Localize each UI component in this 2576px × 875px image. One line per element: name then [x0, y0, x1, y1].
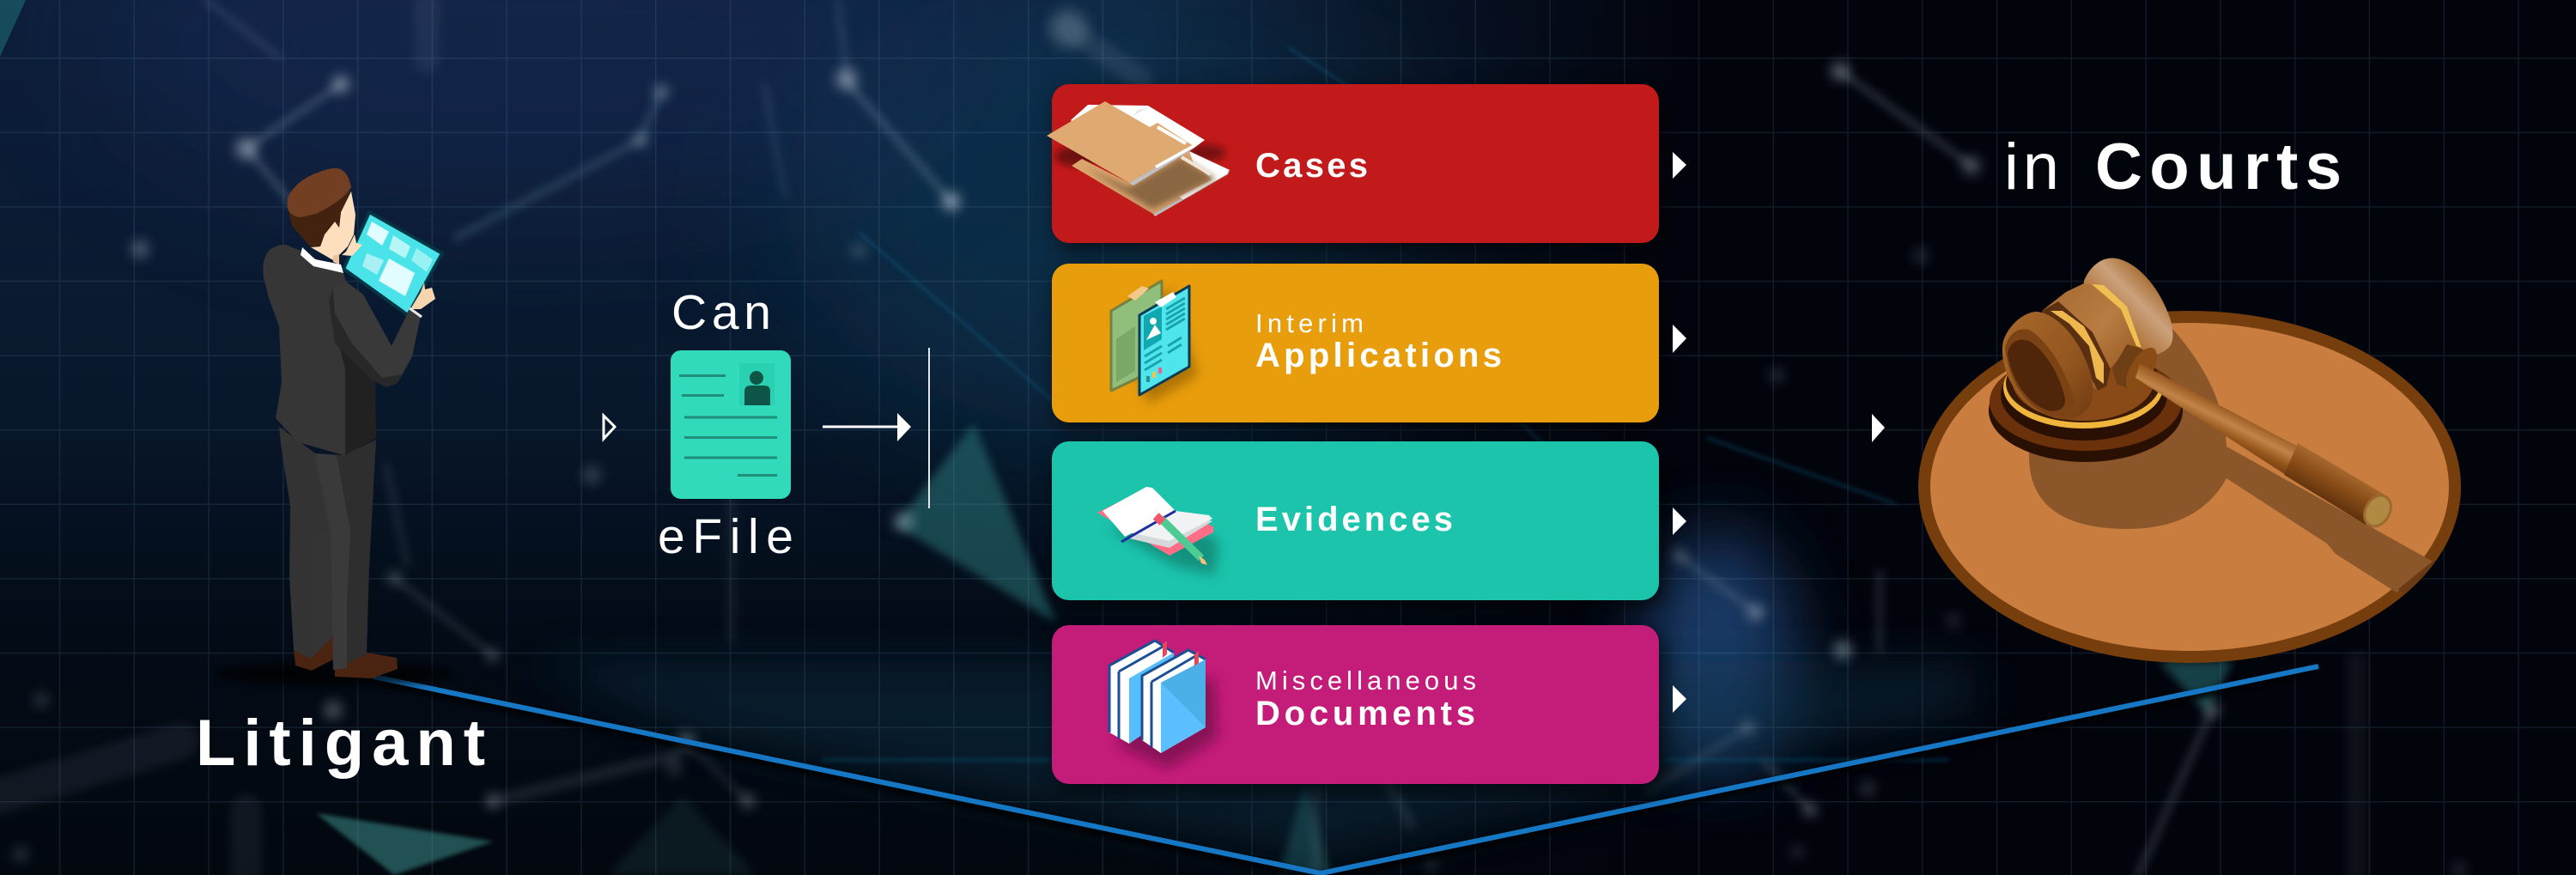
gavel head [2002, 258, 2172, 419]
panel: Interim Applications [1052, 264, 1664, 429]
arrow: Evidences [1673, 507, 1686, 535]
text: Evidences: Evidences [1255, 501, 1453, 538]
arrow to courts [1872, 414, 1885, 442]
arrow: Applications [1673, 325, 1686, 353]
label: Can: Can [671, 285, 771, 340]
arrow: Cases [1673, 152, 1686, 179]
illustration: litigant with tablet [215, 168, 455, 686]
bracket line [928, 348, 930, 508]
panel: Miscellaneous Documents [1052, 625, 1664, 791]
icon: clipped documents [1111, 281, 1198, 404]
text: Miscellaneous Documents: Miscellaneous [1255, 665, 1476, 696]
panel: Evidences [1052, 441, 1664, 607]
panel: Cases [1047, 84, 1664, 250]
collar and hands [301, 234, 435, 309]
text: Interim Applications [1255, 308, 1502, 374]
arm [329, 282, 422, 387]
table disc [1924, 317, 2455, 657]
illustration: gavel on round table [1924, 258, 2464, 657]
tablet [343, 212, 442, 315]
text: Interim Applications: Applications [1255, 337, 1502, 374]
arrow: Documents [1673, 685, 1686, 713]
gavel shadow [2029, 329, 2435, 593]
hollow input arrow [604, 416, 615, 439]
sound block [1989, 338, 2183, 462]
trousers [279, 427, 376, 670]
icon: notebook and pencil [1097, 487, 1219, 575]
text: Miscellaneous Documents [1255, 665, 1476, 732]
text: Miscellaneous Documents: Documents [1255, 695, 1475, 732]
shoes [294, 633, 398, 678]
face and hair [288, 168, 355, 264]
jacket [263, 245, 376, 455]
arrow to document types [823, 413, 911, 441]
icon: eFile document [671, 350, 791, 499]
text: Cases: Cases [1255, 147, 1368, 185]
icon: folders [1047, 101, 1230, 216]
label: eFile: eFile [658, 509, 793, 564]
gavel handle [2112, 343, 2397, 531]
heading: in Courts: Courts [2095, 131, 2342, 204]
label: Litigant: Litigant [196, 707, 485, 780]
floor perspective line [374, 666, 2318, 875]
text: Interim Applications: Interim [1255, 308, 1364, 338]
icon: books [1109, 641, 1218, 769]
heading: in Courts: in [2004, 131, 2059, 204]
